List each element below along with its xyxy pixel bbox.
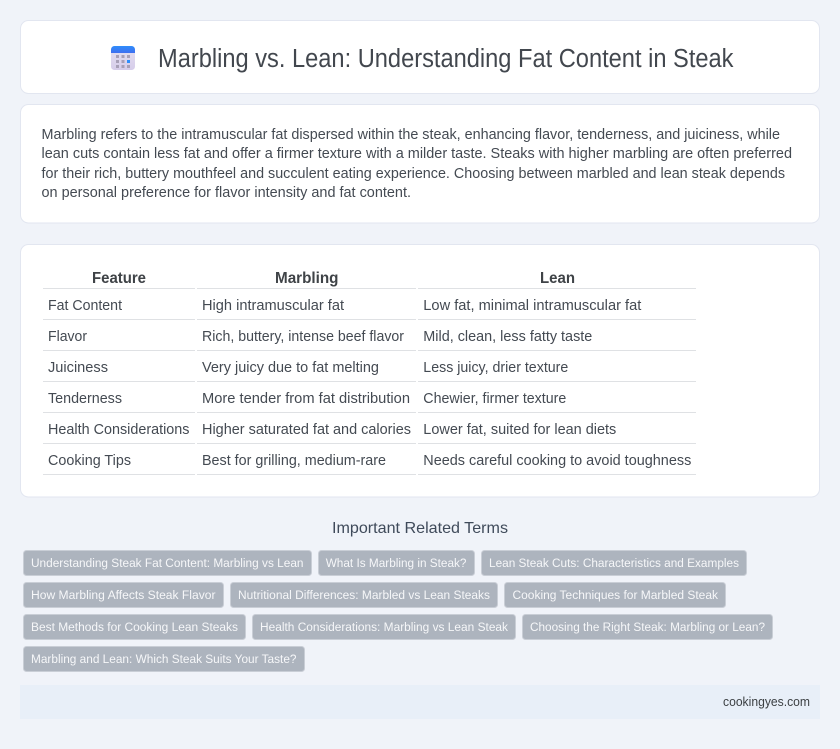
- tag: [522, 614, 772, 640]
- tag: [252, 614, 516, 640]
- tag: Health Considerations: Marbling vs Lean Steak: [260, 620, 509, 634]
- tag: Lean Steak Cuts: Characteristics and Examples: [489, 556, 739, 570]
- table row: juiciness: Juiciness: [48, 360, 108, 376]
- title: Marbling vs. Lean: Understanding Fat Content in Steak: [158, 45, 734, 73]
- text block: description: lean cuts contain less fat and offer a firmer texture with a milder taste. Steaks with higher marbling are often preferred: [42, 146, 792, 162]
- table row: fat content: [43, 298, 696, 320]
- table header row: Feature: [92, 270, 146, 287]
- table row: flavor: [43, 329, 696, 351]
- table row: tenderness: [43, 391, 696, 413]
- table row: tenderness: More tender from fat distribution: [202, 391, 410, 407]
- table row: juiciness: Very juicy due to fat melting: [202, 360, 379, 376]
- table row: cooking tips: Best for grilling, medium-rare: [202, 453, 386, 469]
- text block: description: Marbling refers to the intramuscular fat dispersed within the steak, enhancing flavor, tenderness, and juiciness, while: [42, 127, 780, 143]
- panel: related term tags: [24, 550, 772, 672]
- table row: health considerations: Higher saturated fat and calories: [202, 422, 411, 438]
- tag: How Marbling Affects Steak Flavor: [31, 588, 216, 602]
- table row: tenderness: Tenderness: [48, 391, 122, 407]
- footer: cookingyes.com: [723, 694, 810, 709]
- tag: [24, 646, 304, 672]
- footer: [20, 685, 820, 719]
- tag: [24, 550, 312, 576]
- tag: Marbling and Lean: Which Steak Suits Your Taste?: [31, 652, 297, 666]
- tag: [24, 614, 246, 640]
- table row: tenderness: Chewier, firmer texture: [423, 391, 566, 407]
- tag: [24, 582, 224, 608]
- icon: calendar: [111, 46, 135, 70]
- table row: juiciness: Less juicy, drier texture: [423, 360, 568, 376]
- tag: [230, 582, 498, 608]
- table row: cooking tips: [43, 453, 696, 475]
- table row: cooking tips: Cooking Tips: [48, 453, 131, 469]
- tag: [504, 582, 726, 608]
- table row: fat content: Fat Content: [48, 298, 122, 314]
- table row: flavor: Flavor: [48, 329, 87, 345]
- table row: fat content: Low fat, minimal intramuscular fat: [423, 298, 641, 314]
- panel: comparison table: [20, 244, 820, 497]
- text block: description: for their rich, buttery mouthfeel and succulent eating experience. Choosing between marbled and lean steak depends: [42, 166, 785, 182]
- heading: related terms: Important Related Terms: [332, 520, 508, 537]
- tag: Understanding Steak Fat Content: Marbling vs Lean: [31, 556, 304, 570]
- tag: [482, 550, 746, 576]
- table row: health considerations: [43, 422, 696, 444]
- text block: description: on personal preference for flavor intensity and fat content.: [42, 185, 411, 201]
- tag: Best Methods for Cooking Lean Steaks: [31, 620, 238, 634]
- table row: fat content: High intramuscular fat: [202, 298, 344, 314]
- table row: health considerations: Health Considerations: [48, 422, 190, 438]
- tag: Cooking Techniques for Marbled Steak: [512, 588, 719, 602]
- tag: Choosing the Right Steak: Marbling or Lean?: [530, 620, 765, 634]
- text block: description: [42, 127, 792, 201]
- table row: flavor: Rich, buttery, intense beef flavor: [202, 329, 404, 345]
- panel: intro paragraph: [20, 104, 820, 223]
- tag: [318, 550, 474, 576]
- panel: title header: [20, 20, 820, 94]
- table row: health considerations: Lower fat, suited for lean diets: [423, 422, 616, 438]
- tag: Nutritional Differences: Marbled vs Lean Steaks: [238, 588, 490, 602]
- table header row: Marbling: [275, 270, 338, 287]
- tag: What Is Marbling in Steak?: [326, 556, 467, 570]
- table header row: Lean: [540, 270, 575, 287]
- table row: juiciness: [43, 360, 696, 382]
- table row: flavor: Mild, clean, less fatty taste: [423, 329, 592, 345]
- table row: cooking tips: Needs careful cooking to avoid toughness: [423, 453, 691, 469]
- table header row: [43, 270, 696, 289]
